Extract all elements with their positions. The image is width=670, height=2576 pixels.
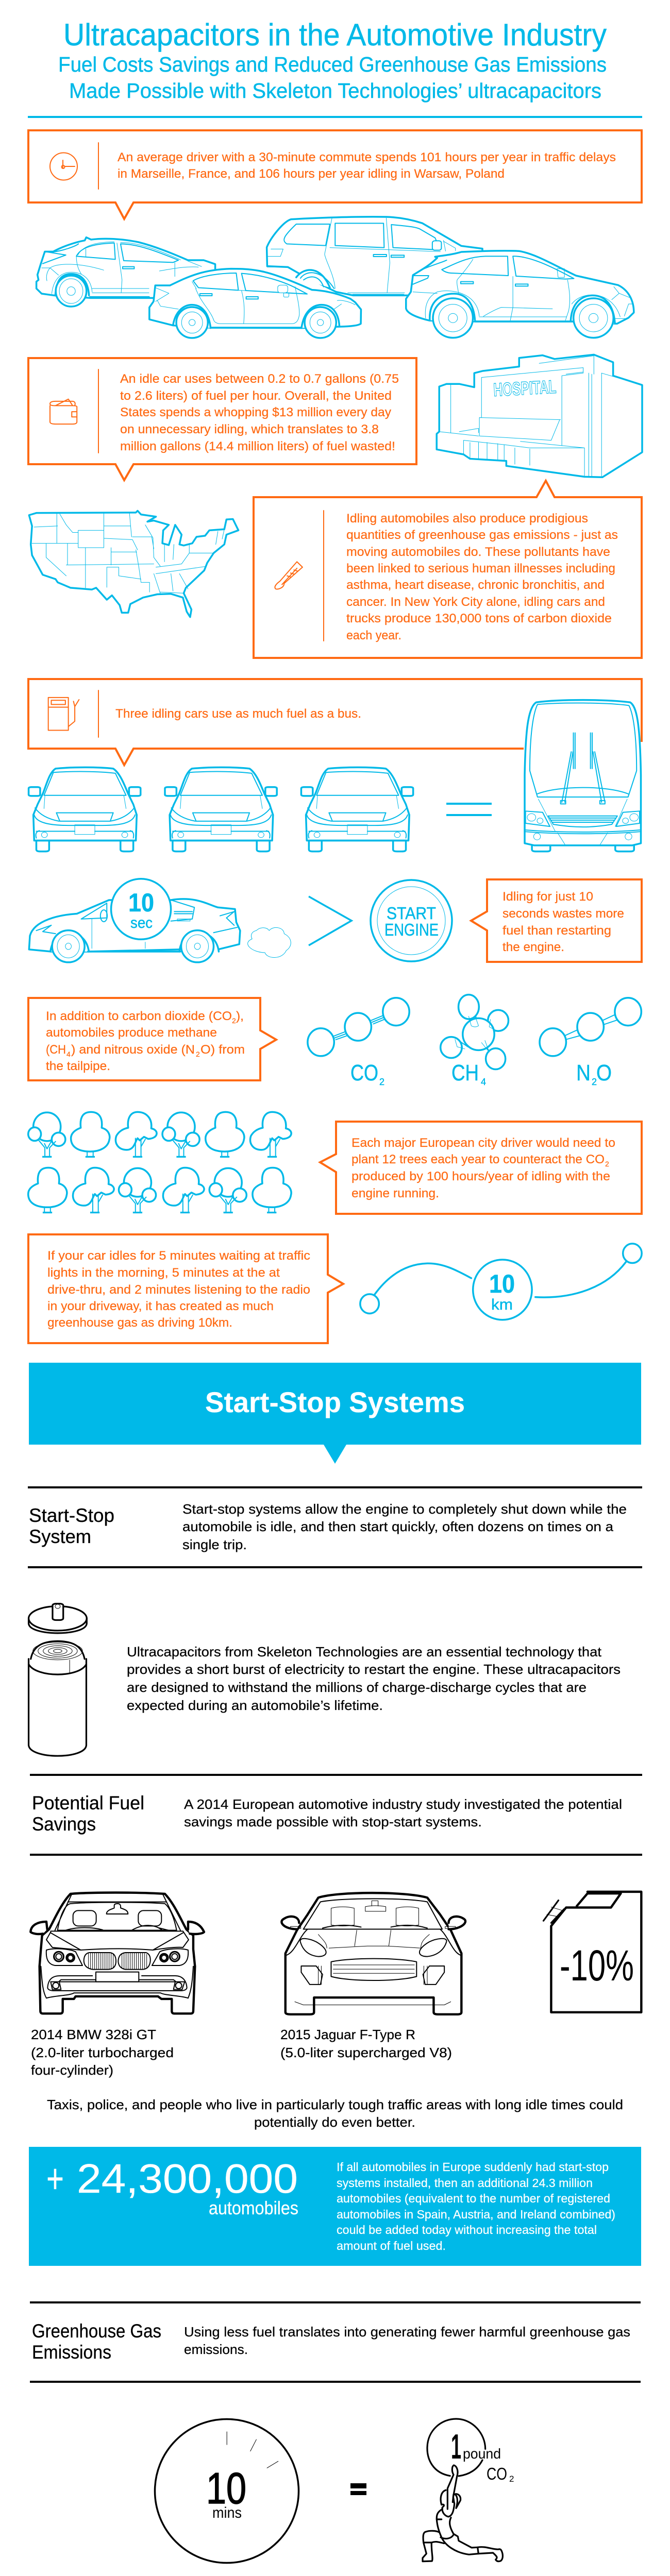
- callout outline: [320, 1122, 642, 1214]
- molecule: CH4: [441, 995, 509, 1087]
- callout text: An average driver with a 30-minute commute spends 101 hours per year in traffic delays: [118, 150, 616, 164]
- big number: [46, 2156, 298, 2218]
- callout text: each year.: [346, 629, 401, 642]
- text block: taxis and police: potentially do even better.: [254, 2114, 415, 2130]
- text block: [184, 1797, 622, 1829]
- text block: emissions.: [184, 2342, 248, 2357]
- route with 10 km badge: km: [491, 1296, 513, 1313]
- heading: Greenhouse Gas: [32, 2320, 161, 2342]
- callout text: engine running.: [351, 1187, 439, 1200]
- idling car with 10 sec badge: sec: [130, 914, 153, 931]
- molecule: N2O: [540, 998, 641, 1087]
- heading: Start-Stop: [29, 1505, 114, 1526]
- text block: could be added today without increasing the total: [337, 2223, 597, 2236]
- panel: greenhouse gas and illnesses callout: [254, 481, 642, 658]
- callout text: [502, 890, 624, 954]
- callout text: fuel than restarting: [502, 924, 611, 938]
- text block: amount of fuel used.: [337, 2239, 446, 2252]
- molecule: N2O: 2: [592, 1077, 597, 1087]
- callout text: [46, 1009, 245, 1073]
- callout outline: [28, 679, 642, 765]
- equals sign: [350, 2483, 366, 2495]
- text block: Using less fuel translates into generating fewer harmful greenhouse gas: [184, 2324, 630, 2340]
- callout text: greenhouse gas as driving 10km.: [47, 1316, 232, 1330]
- map: United States: [29, 511, 239, 617]
- section: potential fuel savings: [32, 1792, 622, 1835]
- caption: BMW: (2.0-liter turbocharged: [31, 2045, 174, 2060]
- callout text: million gallons (14.4 million liters) of fuel wasted!: [120, 439, 395, 453]
- icon: 10 minutes clock: [155, 2419, 299, 2563]
- callout text: lights in the morning, 5 minutes at the at: [47, 1266, 280, 1280]
- icon: 10 minutes clock: mins: [212, 2504, 242, 2521]
- callout text: in your driveway, it has created as much: [47, 1299, 274, 1313]
- panel: 24,300,000 automobiles: [29, 2147, 641, 2266]
- icon: person holding CO2 balloon: CO: [487, 2464, 507, 2483]
- text block: taxis and police: [47, 2097, 623, 2130]
- callout outline: [28, 998, 276, 1080]
- text block: automobiles in Spain, Austria, and Ireland combined): [337, 2208, 615, 2221]
- icon: fuel can with -10%: [543, 1892, 641, 2012]
- front sedan: [149, 269, 361, 338]
- heading: System: [29, 1526, 91, 1547]
- molecule: CH4: 4: [481, 1077, 486, 1087]
- callout text: 4: [66, 1050, 71, 1058]
- text block: ultracapacitors: [127, 1644, 621, 1713]
- callout text: ) and nitrous oxide (N: [71, 1043, 195, 1057]
- callout outline: [28, 130, 642, 219]
- callout text: the engine.: [502, 940, 564, 954]
- callout text: been linked to serious human illnesses including: [346, 562, 615, 575]
- callout text: (CH: [46, 1043, 66, 1057]
- panel: plant trees callout: [320, 1122, 642, 1214]
- heading: Savings: [32, 1814, 96, 1835]
- icon: BMW front view: [30, 1892, 204, 2013]
- title: Made Possible with Skeleton Technologies’ ultracapacitors: [69, 79, 601, 103]
- right SUV: [406, 251, 634, 338]
- molecule: CO2: [308, 998, 409, 1087]
- callout text: Idling for just 10: [502, 890, 593, 904]
- caption: Jaguar: 2015 Jaguar F-Type R: [280, 2027, 415, 2042]
- callout text: seconds wastes more: [502, 907, 624, 921]
- icon: 10 minutes clock: 10: [206, 2464, 246, 2513]
- callout text: plant 12 trees each year to counteract the CO: [351, 1153, 605, 1166]
- icon: start engine button: ENGINE: [384, 920, 439, 939]
- callout text: [346, 512, 618, 642]
- callout outline: [28, 1234, 343, 1343]
- molecule: CO2: CO: [350, 1060, 378, 1086]
- heading: Potential Fuel: [32, 1792, 144, 1814]
- callout text: 2: [232, 1016, 236, 1025]
- callout outline: [471, 879, 642, 962]
- big number: automobiles: [209, 2197, 298, 2218]
- callout text: produced by 100 hours/year of idling with the: [351, 1170, 610, 1183]
- icon: hospital building: HOSPITAL: [493, 376, 557, 400]
- icon: person holding CO2 balloon: 1: [451, 2427, 461, 2466]
- callout text: [118, 150, 616, 181]
- icon: fuel can with -10%: -10%: [560, 1941, 634, 1990]
- text block: automobile is idle, and then start quickly, often dozens on times on a: [182, 1519, 614, 1534]
- panel: idle fuel callout: [28, 358, 416, 480]
- icon: person holding CO2 balloon: pound: [463, 2446, 501, 2462]
- panel: three cars callout: [28, 679, 642, 765]
- title: [58, 18, 607, 103]
- text block: [337, 2160, 615, 2252]
- text block: [184, 2324, 630, 2357]
- icon: hospital building: [437, 354, 642, 477]
- left hatchback: [37, 238, 215, 307]
- route with 10 km badge: 10: [489, 1269, 515, 1298]
- callout text: drive-thru, and 2 minutes listening to the radio: [47, 1283, 310, 1297]
- callout text: cancer. In New York City alone, idling cars and: [346, 595, 605, 609]
- caption: Jaguar: [280, 2027, 452, 2060]
- text block: ultracapacitors: expected during an automobile’s lifetime.: [127, 1698, 383, 1713]
- rear minivan: [267, 217, 482, 295]
- icon: person holding CO2 balloon: [423, 2419, 514, 2562]
- callout text: Three idling cars use as much fuel as a bus.: [115, 707, 361, 721]
- heading: [32, 1792, 144, 1835]
- text block: ultracapacitors: provides a short burst of electricity to restart the engine. These ultracapacitors: [127, 1662, 621, 1677]
- heading: [32, 2320, 161, 2363]
- callout text: to 2.6 liters) of fuel per hour. Overall, the United: [120, 389, 392, 403]
- molecule: N2O: O: [596, 1060, 612, 1086]
- idling car with 10 sec badge: [29, 879, 240, 962]
- equals sign: [446, 803, 492, 816]
- text block: single trip.: [182, 1537, 247, 1552]
- big number: +: [46, 2156, 64, 2201]
- arrow: greater-than chevron: [309, 896, 351, 945]
- caption: BMW: 2014 BMW 328i GT: [31, 2027, 156, 2042]
- callout text: States spends a whopping $13 million every day: [120, 405, 391, 419]
- text block: ultracapacitors: Ultracapacitors from Skeleton Technologies are an essential technology that: [127, 1644, 602, 1659]
- callout text: [120, 372, 399, 453]
- callout outline: [28, 358, 416, 480]
- callout text: O) from: [200, 1043, 245, 1057]
- icon: wallet: [50, 399, 77, 424]
- callout text: In addition to carbon dioxide (CO: [46, 1009, 232, 1023]
- icon: ultracapacitor: [29, 1604, 87, 1756]
- callout text: the tailpipe.: [46, 1059, 110, 1073]
- text block: savings made possible with stop-start systems.: [184, 1814, 482, 1829]
- panel: methane and nitrous oxide callout: [28, 998, 276, 1080]
- caption: BMW: [31, 2027, 174, 2078]
- callout text: trucks produce 130,000 tons of carbon dioxide: [346, 612, 612, 625]
- icon: clock: [50, 152, 77, 180]
- icon: Jaguar front view: [281, 1893, 465, 2014]
- traffic of four cars: [37, 217, 634, 338]
- text block: taxis and police: Taxis, police, and people who live in particularly tough traffic areas with long idle times could: [47, 2097, 623, 2112]
- banner: Start-Stop Systems: Start-Stop Systems: [205, 1386, 465, 1418]
- icon: start engine button: START: [387, 904, 436, 923]
- section: start-stop system definition: [29, 1501, 627, 1552]
- callout text: Idling automobiles also produce prodigious: [346, 512, 588, 526]
- caption: Jaguar: (5.0-liter supercharged V8): [280, 2045, 452, 2060]
- callout text: 2: [196, 1050, 200, 1058]
- caption: BMW: four-cylinder): [31, 2062, 113, 2078]
- big number: 24,300,000: [77, 2156, 298, 2201]
- callout text: quantities of greenhouse gas emissions - just as: [346, 528, 618, 542]
- panel: commute callout: [28, 130, 642, 219]
- text block: systems installed, then an additional 24.3 million: [337, 2176, 593, 2190]
- callout text: [47, 1249, 310, 1330]
- callout text: An idle car uses between 0.2 to 0.7 gallons (0.75: [120, 372, 399, 386]
- title: Ultracapacitors in the Automotive Industry: [63, 18, 607, 52]
- heading: [29, 1505, 114, 1547]
- banner: Start-Stop Systems: [29, 1363, 641, 1464]
- callout text: in Marseille, France, and 106 hours per year idling in Warsaw, Poland: [118, 167, 505, 181]
- title: Fuel Costs Savings and Reduced Greenhouse Gas Emissions: [58, 53, 607, 76]
- section: greenhouse gas emissions: [32, 2320, 630, 2363]
- text block: automobiles (equivalent to the number of registered: [337, 2192, 610, 2205]
- text block: A 2014 European automotive industry study investigated the potential: [184, 1797, 622, 1812]
- icon: thermometer: [275, 562, 303, 589]
- icon: fuel pump: [48, 698, 79, 731]
- text block: ultracapacitors: are designed to withstand the millions of charge-discharge cycles that are: [127, 1680, 587, 1695]
- icon: start engine button: [371, 880, 452, 961]
- callout text: asthma, heart disease, chronic bronchitis, and: [346, 578, 605, 592]
- callout text: Each major European city driver would need to: [351, 1136, 615, 1150]
- text block: [182, 1501, 627, 1552]
- callout text: ),: [236, 1009, 244, 1023]
- heading: Emissions: [32, 2342, 111, 2363]
- idling car with 10 sec badge: 10: [128, 888, 154, 917]
- callout text: [351, 1136, 615, 1200]
- molecule: N2O: N: [576, 1060, 591, 1086]
- molecule: CH4: CH: [451, 1060, 479, 1086]
- icon: bus: [525, 700, 641, 852]
- icon: exhaust cloud: [248, 927, 291, 957]
- icon: person holding CO2 balloon: 2: [509, 2474, 514, 2484]
- three front-view cars: [29, 767, 413, 852]
- text block: If all automobiles in Europe suddenly had start-stop: [337, 2160, 609, 2174]
- panel: 5 minutes idling callout: [28, 1234, 343, 1343]
- text block: Start-stop systems allow the engine to completely shut down while the: [182, 1501, 627, 1517]
- callout text: If your car idles for 5 minutes waiting at traffic: [47, 1249, 310, 1263]
- route with 10 km badge: [360, 1244, 642, 1320]
- molecule: CO2: 2: [379, 1077, 384, 1087]
- callout text: automobiles produce methane: [46, 1026, 217, 1040]
- panel: idling 10 seconds callout: [471, 879, 642, 962]
- callout outline: [254, 481, 642, 658]
- callout text: on unnecessary idling, which translates to 3.8: [120, 422, 379, 436]
- callout text: moving automobiles do. These pollutants have: [346, 545, 610, 559]
- twelve trees: [28, 1112, 291, 1213]
- callout text: 2: [605, 1160, 609, 1168]
